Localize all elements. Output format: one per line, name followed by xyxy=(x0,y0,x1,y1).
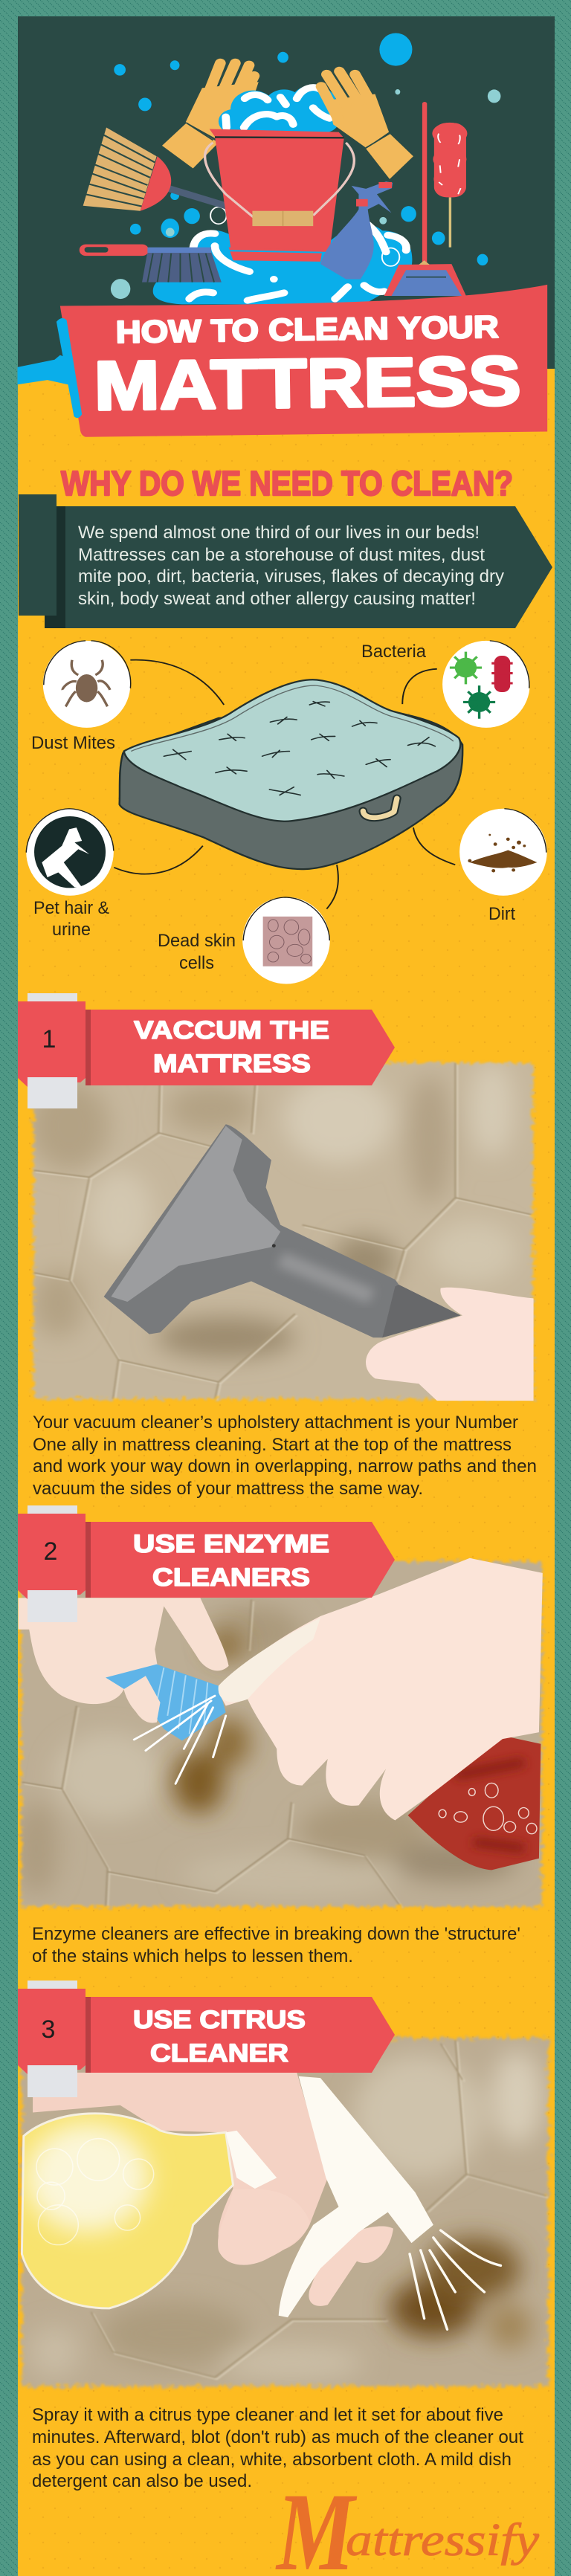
step title: USE CITRUS xyxy=(133,2006,306,2034)
label: dirt: Dirt xyxy=(488,904,515,924)
icon: bacteria xyxy=(442,641,530,728)
section heading: why do we need to clean: WHY DO WE NEED TO CLEAN? xyxy=(61,464,513,503)
step title xyxy=(134,1016,329,1078)
label: dead skin cells: cells xyxy=(179,953,214,973)
icon: dead skin cells xyxy=(242,897,330,984)
step 1 text: and work your way down in overlapping, narrow paths and then xyxy=(33,1456,537,1476)
heading: Mattress: MATTRESS xyxy=(94,342,521,425)
mattress diagram xyxy=(26,641,547,984)
step 1 text: Your vacuum cleaner’s upholstery attachment is your Number xyxy=(33,1413,518,1433)
photo: vacuum attachment on mattress xyxy=(28,1059,538,1403)
stain xyxy=(390,2238,532,2349)
intro text: mite poo, dirt, bacteria, viruses, flakes of decaying dry xyxy=(78,566,504,587)
fingers xyxy=(218,2189,393,2306)
icon: pet hair and urine xyxy=(26,809,114,896)
step 2 text xyxy=(32,1924,520,1966)
foam above bucket xyxy=(219,85,339,134)
step 3 text xyxy=(32,2405,523,2491)
spray lines xyxy=(134,1696,226,1783)
hand holding vacuum xyxy=(366,1288,534,1401)
spray bottle xyxy=(226,2076,433,2317)
step 1 text xyxy=(33,1413,537,1499)
label: dead skin cells xyxy=(158,931,236,973)
left hand xyxy=(18,1598,229,1723)
mattress illustration xyxy=(120,679,462,869)
step 3 text: Spray it with a citrus type cleaner and let it set for about five xyxy=(32,2405,503,2425)
right glove xyxy=(321,71,413,179)
step number: 2 xyxy=(44,1537,57,1566)
spray bottle nozzle xyxy=(219,1618,320,1702)
large foam under bucket xyxy=(153,207,412,304)
header illustration: cleaning supplies xyxy=(80,33,500,304)
duster and dustpan xyxy=(384,104,467,296)
step 1 text: One ally in mattress cleaning. Start at the top of the mattress xyxy=(33,1435,512,1455)
intro callout arrow xyxy=(19,494,552,628)
step number: 3 xyxy=(42,2015,55,2044)
broom xyxy=(83,127,228,211)
red banner shape xyxy=(60,285,547,437)
intro text xyxy=(78,523,504,609)
label: bacteria: Bacteria xyxy=(361,642,427,662)
intro text: skin, body sweat and other allergy causing matter! xyxy=(78,589,476,609)
step 3 panel xyxy=(18,1981,554,2491)
step 2 text: of the stains which helps to lessen them. xyxy=(32,1946,353,1966)
hand brush xyxy=(80,245,222,283)
lower tab xyxy=(28,1077,77,1108)
photo: spraying citrus cleaner xyxy=(18,2025,554,2406)
stain xyxy=(173,1630,250,1814)
icon: dirt xyxy=(459,809,547,896)
arm xyxy=(33,2073,328,2255)
icon: dust mite xyxy=(43,641,131,728)
lower tab xyxy=(28,1590,77,1622)
left glove xyxy=(162,63,259,169)
logo: Mattressify: attressify xyxy=(346,2515,540,2566)
photo: spraying enzyme cleaner xyxy=(15,1550,553,1931)
step 3 banner xyxy=(18,1981,395,2097)
step 1 text: vacuum the sides of your mattress the same way. xyxy=(33,1479,423,1499)
red bucket xyxy=(205,129,354,262)
intro text: We spend almost one third of our lives in our beds! xyxy=(78,523,480,543)
logo: Mattressify xyxy=(275,2470,540,2576)
right hand xyxy=(219,1558,543,1820)
soap bubbles xyxy=(111,33,500,299)
spray bottle xyxy=(320,181,393,280)
icon: squeegee handle xyxy=(18,355,69,385)
step 1 banner xyxy=(18,993,395,1108)
intro text: Mattresses can be a storehouse of dust mites, dust xyxy=(78,545,485,565)
step title: CLEANERS xyxy=(152,1563,310,1592)
vacuum nozzle xyxy=(104,1124,461,1337)
step title xyxy=(133,2006,306,2067)
label: dead skin cells: Dead skin xyxy=(158,931,236,951)
step 1 panel xyxy=(18,993,553,1499)
step title: VACCUM THE xyxy=(134,1016,329,1045)
heading: How to clean your: HOW TO CLEAN YOUR xyxy=(115,309,499,349)
label: pet hair and urine: urine xyxy=(52,920,91,940)
label: pet hair and urine xyxy=(33,898,109,940)
step title: MATTRESS xyxy=(153,1050,311,1078)
lower tab xyxy=(28,2065,77,2097)
step 3 text: as you can using a clean, white, absorbent cloth. A mild dish xyxy=(32,2450,512,2470)
label: pet hair and urine: Pet hair & xyxy=(33,898,109,918)
icon: squeegee blade xyxy=(57,318,82,418)
step 3 text: detergent can also be used. xyxy=(32,2471,252,2491)
step 2 banner xyxy=(18,1505,395,1622)
red cloth with bubbles xyxy=(408,1736,541,1870)
spray lines xyxy=(410,2230,500,2329)
step 2 panel xyxy=(15,1505,553,1966)
step title: CLEANER xyxy=(150,2039,288,2067)
label: dust mites: Dust Mites xyxy=(31,733,115,753)
mattress tufts xyxy=(164,702,435,795)
step title xyxy=(133,1530,329,1592)
blue cloth xyxy=(106,1665,226,1740)
step 2 text: Enzyme cleaners are effective in breaking down the 'structure' xyxy=(32,1924,520,1944)
step 3 text: minutes. Afterward, blot (don't rub) as much of the cleaner out xyxy=(32,2427,523,2447)
step number: 1 xyxy=(42,1025,56,1053)
step title: USE ENZYME xyxy=(133,1530,329,1558)
connector lines xyxy=(114,660,455,909)
title banner xyxy=(18,285,547,437)
dark header panel xyxy=(18,16,555,369)
yellow sponge xyxy=(22,2114,233,2308)
